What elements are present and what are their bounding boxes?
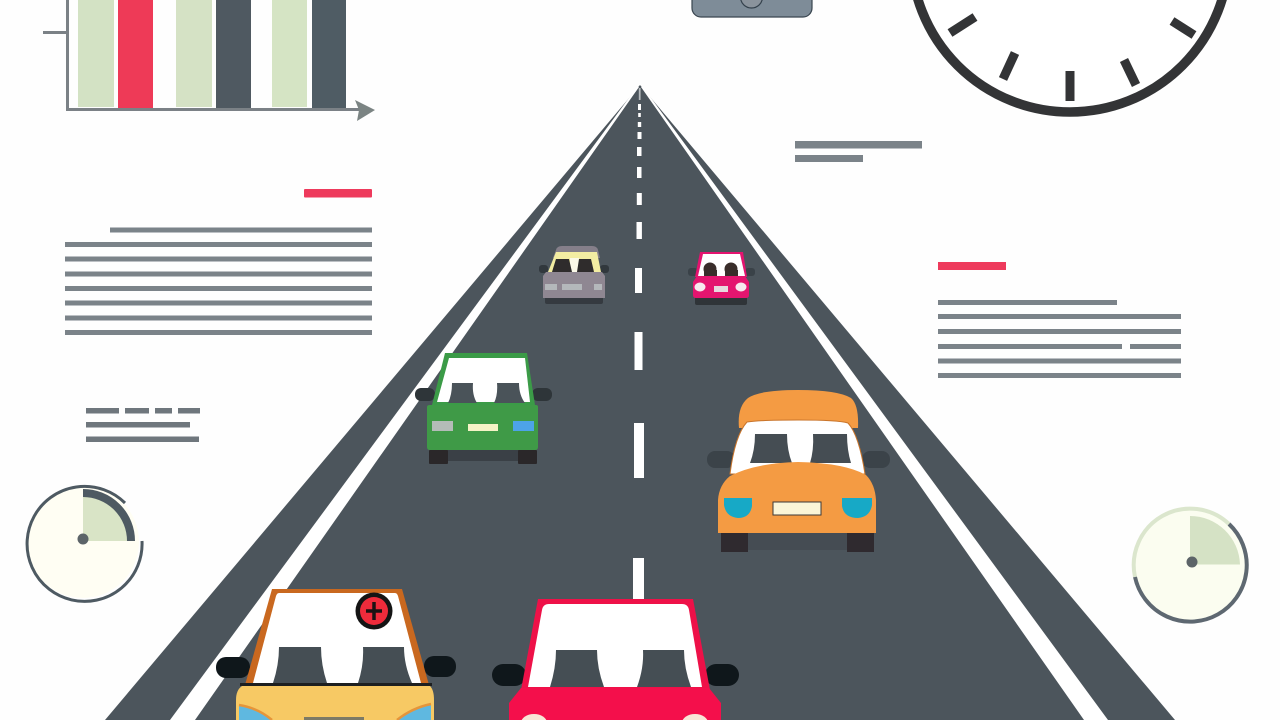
gauge dark arc <box>1135 524 1247 622</box>
body <box>718 462 876 533</box>
windshield centre <box>570 258 579 272</box>
gauge: left <box>27 486 142 601</box>
seats <box>704 262 738 276</box>
text block: right <box>938 262 1181 378</box>
windshield <box>730 420 865 474</box>
gauge face <box>27 486 139 598</box>
wheels <box>429 450 537 464</box>
gauge: right <box>1134 509 1247 622</box>
body <box>427 405 538 450</box>
red heading bar <box>304 189 372 198</box>
chart axes <box>68 0 360 110</box>
right light <box>513 421 534 431</box>
mirrors <box>216 656 456 678</box>
windshield <box>528 604 702 687</box>
seats <box>750 434 792 463</box>
bumper <box>747 533 848 550</box>
left light <box>239 705 272 720</box>
grey text lines <box>65 228 372 335</box>
body <box>509 688 721 720</box>
mirrors <box>492 664 739 686</box>
road <box>105 85 1175 720</box>
red heading bar <box>938 262 1006 270</box>
text block: small left <box>86 408 200 442</box>
base line <box>240 683 432 686</box>
text block: top right <box>795 141 922 162</box>
lights and plate <box>694 282 746 292</box>
red cross badge <box>356 592 392 630</box>
plate <box>773 502 821 515</box>
left headlight <box>521 714 547 720</box>
windshield <box>698 254 745 276</box>
body <box>543 272 605 298</box>
gauge sector <box>1190 516 1240 564</box>
clock ring <box>911 0 1229 112</box>
bars <box>78 0 346 108</box>
axis tick <box>43 31 67 34</box>
right edge line <box>641 87 1108 720</box>
left edge line <box>170 87 639 720</box>
axis arrowhead <box>355 100 375 121</box>
car: grey far <box>539 246 609 304</box>
plate <box>304 717 364 720</box>
clock ticks <box>950 17 1194 101</box>
road surface <box>105 85 1175 720</box>
left light <box>432 421 453 431</box>
windshield frame <box>521 599 710 690</box>
car: yellow with badge <box>216 589 456 720</box>
lights and plate <box>545 284 602 290</box>
seats <box>448 383 477 403</box>
windshield <box>437 358 530 402</box>
right headlight <box>842 498 872 518</box>
car: pink far <box>688 252 755 305</box>
mirrors <box>707 451 890 468</box>
windshield <box>548 252 601 272</box>
gauge outer ring <box>27 486 142 601</box>
grey text lines <box>938 300 1181 378</box>
windshield <box>253 593 421 683</box>
car: red <box>492 599 739 720</box>
windshield frame <box>432 353 535 405</box>
left headlight <box>724 498 752 518</box>
seats <box>550 650 604 687</box>
gauge light arc <box>1134 509 1229 577</box>
bar chart <box>43 0 375 121</box>
windshield frame <box>695 252 747 277</box>
wheels <box>545 296 603 304</box>
seats <box>273 647 327 683</box>
gauge hub <box>78 534 88 544</box>
wheels <box>721 533 874 552</box>
gauge sector <box>83 495 129 541</box>
wheels <box>695 296 747 305</box>
gauge hub <box>1186 556 1198 568</box>
clock <box>911 0 1229 112</box>
gauge thick arc <box>83 493 131 541</box>
text block: left <box>65 189 372 335</box>
car: green <box>415 353 552 464</box>
plate <box>468 424 498 431</box>
roof <box>553 246 600 258</box>
right light <box>397 704 431 720</box>
seats <box>552 259 594 272</box>
mirrors <box>688 268 755 276</box>
mirrors <box>415 388 552 401</box>
gauge face <box>1134 509 1246 621</box>
right headlight <box>682 714 708 720</box>
camera device <box>692 0 812 17</box>
windshield frame <box>245 589 429 685</box>
car: orange <box>707 390 890 552</box>
bumper <box>447 450 519 461</box>
centre dashes <box>633 88 644 602</box>
roof rack <box>739 390 858 428</box>
body <box>693 276 749 298</box>
body <box>236 686 434 720</box>
mirrors <box>539 265 609 273</box>
